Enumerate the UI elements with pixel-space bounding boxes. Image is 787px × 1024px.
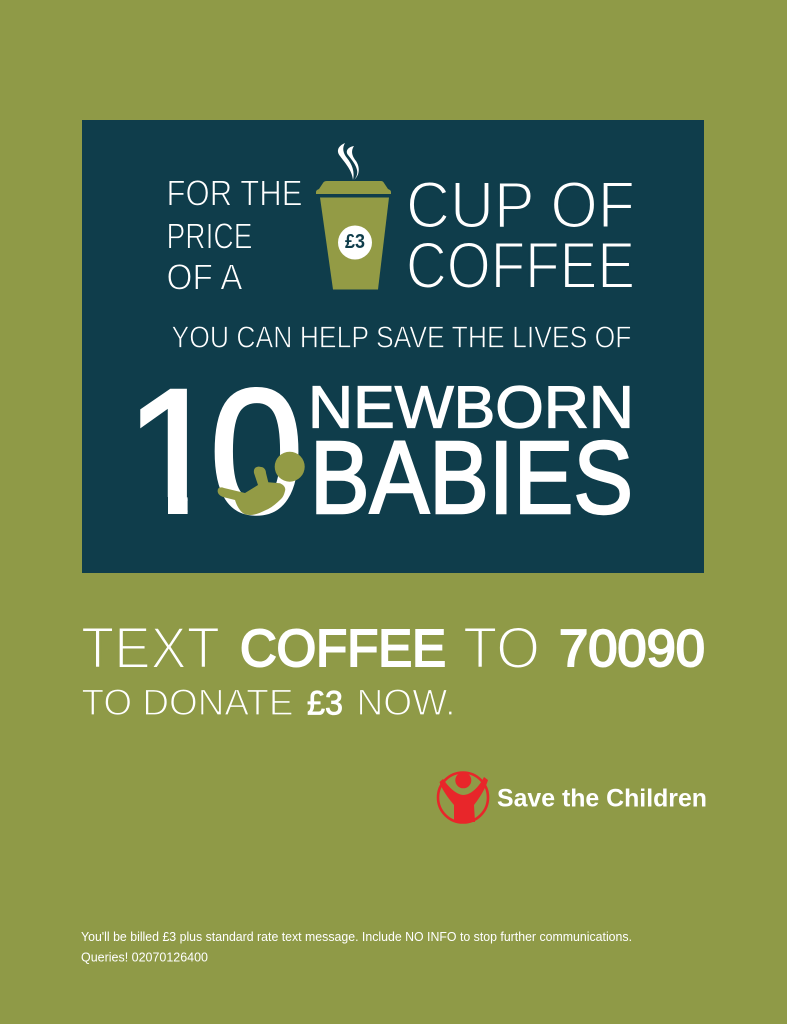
panel: coffee message	[82, 120, 704, 573]
text: Save the Children: Save the Children	[497, 784, 707, 812]
logo: Save the Children	[438, 772, 707, 822]
text: small print: Queries! 02070126400	[81, 950, 208, 964]
icon: coffee cup: £3	[345, 231, 365, 253]
text: for the price of a: PRICE	[166, 216, 252, 256]
text: 10: 1	[125, 352, 223, 550]
text: small print	[81, 930, 632, 964]
subheading: to donate 3 pounds now: NOW.	[356, 681, 456, 723]
text: 10	[140, 387, 298, 516]
icon: coffee cup	[316, 143, 391, 290]
heading: text coffee to 70090: 70090	[559, 620, 705, 678]
text: newborn babies: BABIES	[310, 420, 633, 535]
heading: text coffee to 70090: COFFEE	[240, 620, 446, 678]
poster	[81, 120, 706, 964]
icon: baby	[218, 452, 305, 515]
icon: child emblem	[438, 772, 488, 822]
subheading: to donate 3 pounds now: £3	[307, 684, 343, 722]
subheading: to donate 3 pounds now: TO DONATE	[82, 681, 294, 723]
text: for the price of a	[166, 172, 302, 298]
text: cup of coffee: CUP OF	[406, 168, 635, 242]
text: small print: You'll be billed £3 plus standard rate text message. Include NO INFO to stop further communications.	[81, 930, 632, 944]
heading: text coffee to 70090: TEXT	[81, 616, 220, 681]
heading: text coffee to 70090: TO	[463, 616, 540, 681]
text: for the price of a: OF A	[166, 256, 243, 298]
text: newborn babies: NEWBORN	[308, 374, 634, 440]
text: newborn babies	[308, 374, 634, 535]
subheading: to donate 3 pounds now	[82, 681, 456, 723]
heading: text coffee to 70090	[81, 616, 705, 681]
text: cup of coffee	[406, 168, 635, 302]
text: you can help save the lives of: YOU CAN HELP SAVE THE LIVES OF	[172, 320, 632, 354]
text: cup of coffee: COFFEE	[406, 229, 635, 302]
text: for the price of a: FOR THE	[166, 172, 302, 214]
text: 10: 0	[210, 352, 303, 550]
